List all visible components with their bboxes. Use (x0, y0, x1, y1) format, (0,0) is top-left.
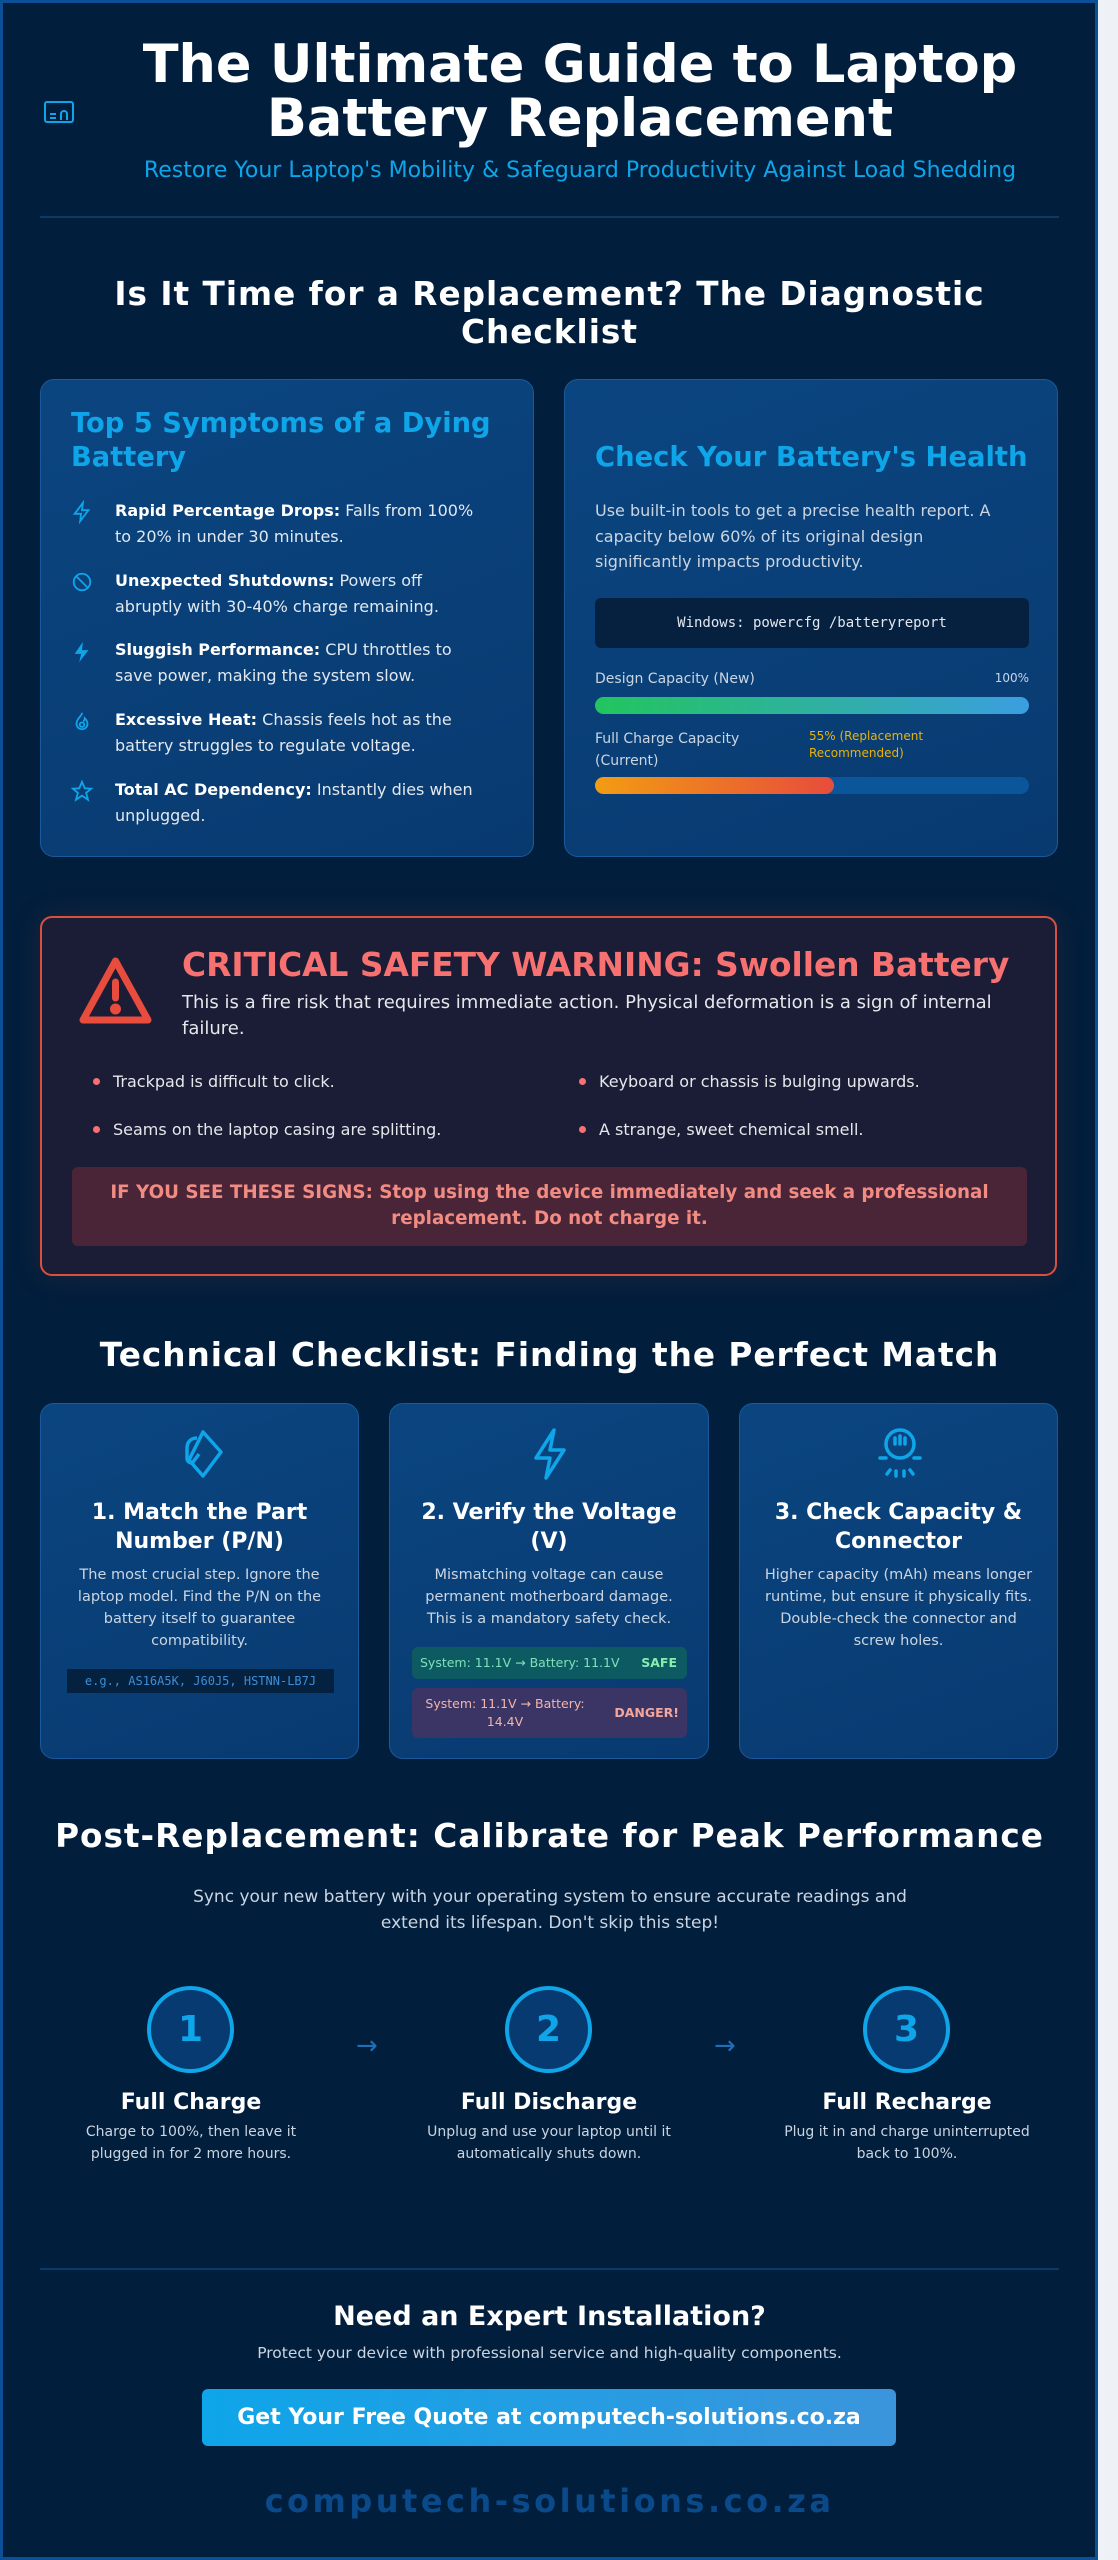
callout: stop using: replacement. Do not charge it. (391, 1208, 708, 1229)
panel: capacity: Connector (835, 1529, 962, 1554)
symptom list: Excessive Heat: Chassis feels hot as the battery struggles to regulate voltage. (115, 710, 452, 754)
icon: connector (878, 1428, 922, 1478)
panel: voltage: 2. Verify the Voltage (421, 1500, 677, 1525)
health heading: Check Your Battery's Health (595, 442, 1028, 473)
step 2: Full Discharge (461, 2090, 637, 2115)
calibrate intro: extend its lifespan. Don't skip this step! (381, 1913, 719, 1933)
heading: diagnostic checklist: Is It Time for a Replacement? The Diagnostic (114, 275, 985, 313)
danger voltage example (412, 1688, 687, 1738)
symptom list: Sluggish Performance: CPU throttles to save power, making the system slow. (115, 640, 452, 684)
command box (595, 598, 1029, 648)
design capacity bar: 100% (995, 671, 1029, 685)
panel: voltage: Mismatching voltage can cause permanent motherboard damage. This is a mandatory safety check. (425, 1567, 673, 1627)
step 2: 2 (536, 2009, 561, 2050)
danger voltage example: DANGER! (614, 1705, 679, 1720)
step 3: 3 (894, 2009, 919, 2050)
warning description: This is a fire risk that requires immediate action. Physical deformation is a sign of internal failure. (182, 992, 992, 1039)
panel: capacity: 3. Check Capacity & (775, 1500, 1022, 1525)
heading: diagnostic checklist: Checklist (461, 313, 638, 351)
warning signs list: Seams on the laptop casing are splitting. (113, 1120, 441, 1139)
panel: part number (40, 1403, 359, 1759)
panel: voltage: (V) (530, 1529, 568, 1554)
panel: battery health (564, 379, 1058, 857)
footer brand: computech-solutions.co.za (265, 2482, 834, 2520)
arrow 2: → (714, 2031, 736, 2061)
callout: stop using (72, 1167, 1027, 1246)
part number examples (67, 1669, 334, 1693)
design capacity bar: Design Capacity (New) (595, 671, 755, 687)
step 1: Full Charge (121, 2090, 261, 2115)
step 3: back to 100%. (857, 2146, 957, 2162)
title (143, 34, 1017, 149)
heading: diagnostic checklist (114, 275, 985, 351)
heading: technical checklist: Technical Checklist: Finding the Perfect Match (100, 1336, 999, 1374)
safe voltage example: SAFE (641, 1655, 677, 1670)
step 1: plugged in for 2 more hours. (91, 2146, 291, 2162)
calibrate intro (193, 1887, 907, 1933)
cta button: Get Your Free Quote at computech-solutions.co.za (237, 2405, 861, 2430)
health text: Use built-in tools to get a precise health report. A capacity below 60% of its original design significantly impacts productivity. (595, 501, 990, 571)
title: The Ultimate Guide to Laptop (143, 34, 1017, 95)
panel: part number: The most crucial step. Ignore the laptop model. Find the P/N on the battery itself to guarantee compatibility. (78, 1567, 321, 1649)
panel: part number: 1. Match the Part (92, 1500, 307, 1525)
icon: warning triangle (80, 958, 152, 1024)
icon: tag (185, 1430, 223, 1478)
symptoms heading: Top 5 Symptoms of a Dying Battery (71, 408, 491, 473)
panel: capacity: Higher capacity (mAh) means longer runtime, but ensure it physically fits. Double-check the connector and screw holes. (765, 1567, 1032, 1649)
command box: Windows: powercfg /batteryreport (677, 615, 947, 631)
panel: voltage (389, 1403, 709, 1759)
danger voltage example: System: 11.1V → Battery: 14.4V (425, 1696, 585, 1729)
calibrate intro: Sync your new battery with your operating system to ensure accurate readings and (193, 1887, 907, 1907)
warning title: CRITICAL SAFETY WARNING: Swollen Battery (182, 946, 1009, 984)
current capacity bar: 55% (Replacement Recommended) (809, 729, 923, 760)
warning signs list: A strange, sweet chemical smell. (599, 1120, 864, 1139)
step 1: Charge to 100%, then leave it (86, 2124, 296, 2140)
safe voltage example: System: 11.1V → Battery: 11.1V (420, 1655, 620, 1670)
warning signs list (93, 1072, 920, 1139)
step 2: Unplug and use your laptop until it (427, 2124, 671, 2140)
design capacity bar (595, 671, 1029, 714)
callout: stop using: IF YOU SEE THESE SIGNS: Stop using the device immediately and seek a professional (110, 1182, 989, 1203)
step 2: automatically shuts down. (457, 2146, 641, 2162)
current capacity bar: Full Charge Capacity (Current) (595, 731, 739, 769)
step 1: 1 (178, 2009, 203, 2050)
warning signs list: Keyboard or chassis is bulging upwards. (599, 1072, 920, 1091)
current capacity bar (595, 729, 1029, 794)
step 3 (784, 1986, 1030, 2162)
step 1 (86, 1986, 296, 2162)
icon: bolt (534, 1428, 566, 1480)
cta heading: Need an Expert Installation? (333, 2301, 766, 2332)
panel: safety warning (40, 916, 1057, 1276)
symptom list (71, 500, 473, 824)
part number examples: e.g., AS16A5K, J60J5, HSTNN-LB7J (85, 1674, 316, 1688)
cta text: Protect your device with professional service and high-quality components. (257, 2344, 842, 2362)
step 3: Full Recharge (822, 2090, 992, 2115)
symptom list: Unexpected Shutdowns: Powers off abruptly with 30-40% charge remaining. (115, 571, 439, 616)
panel: symptoms (40, 379, 534, 857)
warning signs list: Trackpad is difficult to click. (113, 1072, 335, 1091)
step 2 (427, 1986, 671, 2162)
header icon (44, 101, 74, 123)
symptom list: Total AC Dependency: Instantly dies when unplugged. (115, 780, 473, 824)
safe voltage example (412, 1647, 687, 1679)
subtitle: Restore Your Laptop's Mobility & Safeguard Productivity Against Load Shedding (144, 158, 1016, 183)
panel: capacity (739, 1403, 1058, 1759)
heading: calibrate: Post-Replacement: Calibrate for Peak Performance (55, 1817, 1044, 1855)
cta button (202, 2389, 896, 2446)
symptom list: Rapid Percentage Drops: Falls from 100% to 20% in under 30 minutes. (115, 501, 473, 546)
panel: part number: Number (P/N) (115, 1529, 284, 1554)
title: Battery Replacement (267, 88, 893, 149)
arrow 1: → (356, 2031, 378, 2061)
step 3: Plug it in and charge uninterrupted (784, 2124, 1030, 2140)
